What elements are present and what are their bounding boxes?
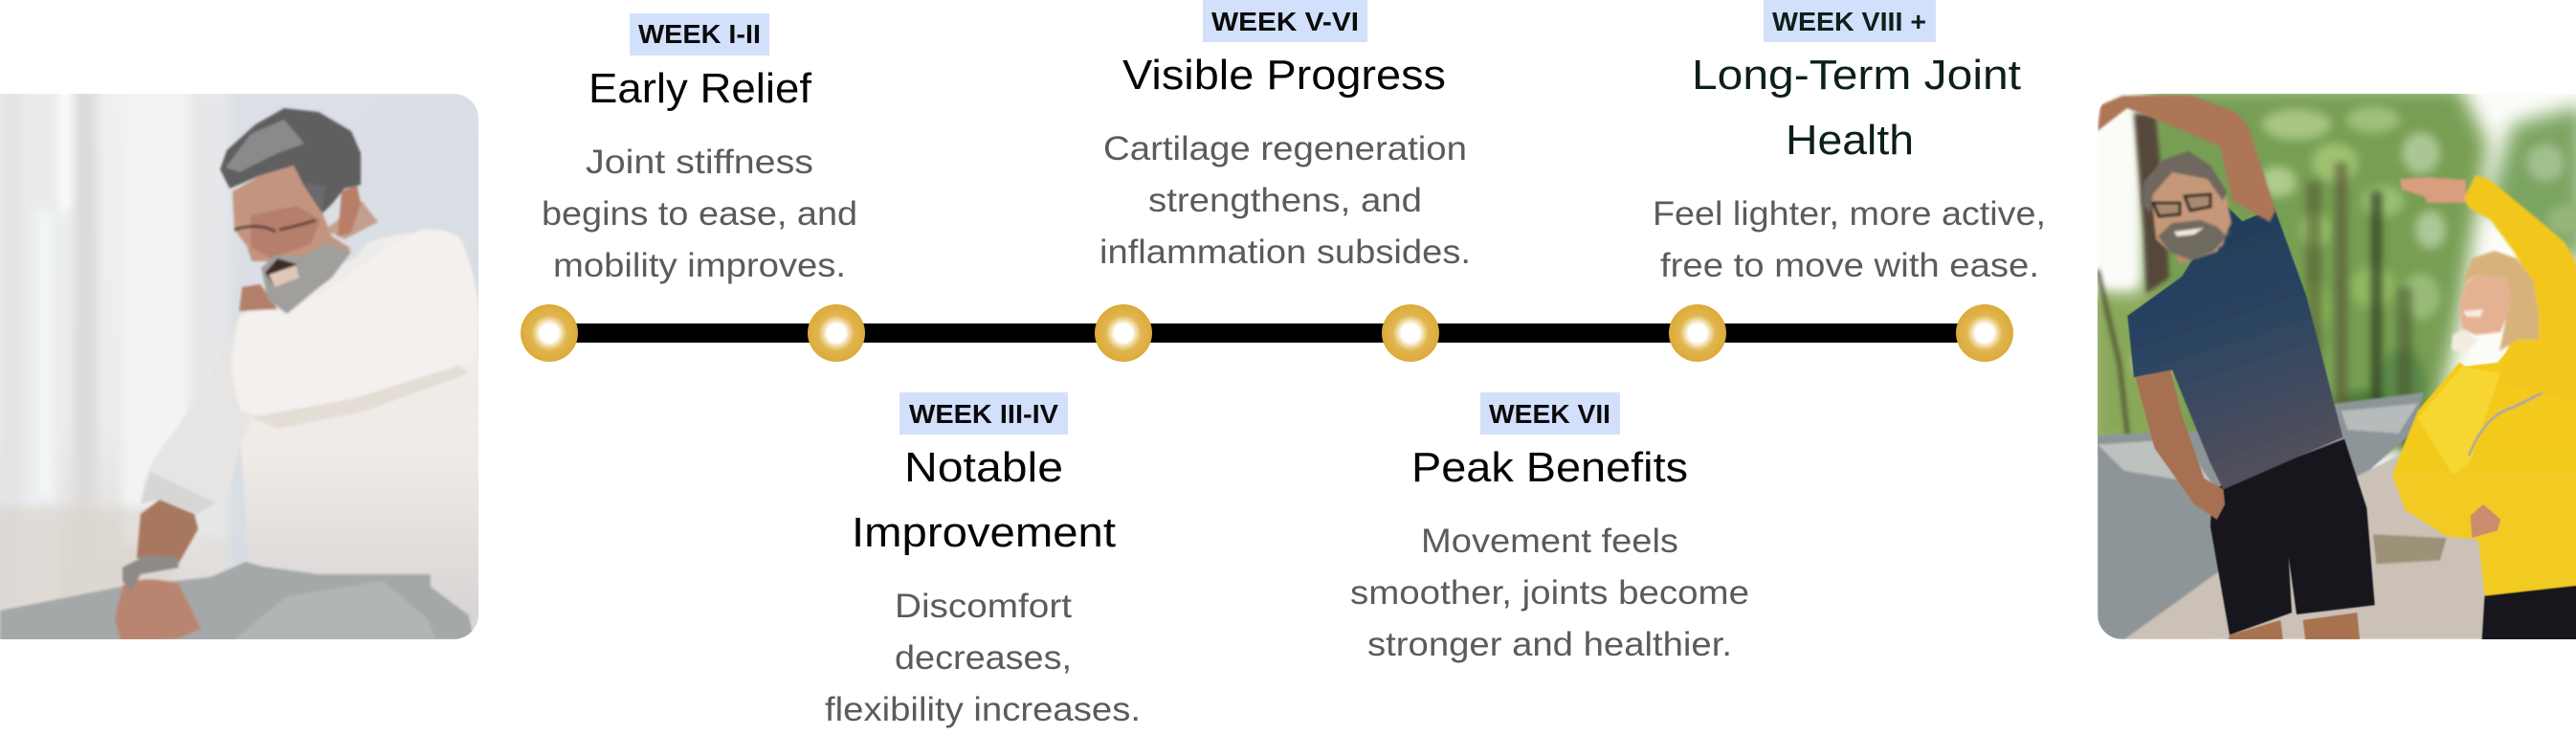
- description: [1099, 130, 1471, 271]
- week badge: [1203, 0, 1367, 42]
- panel: week V-VI visible progress: [1099, 0, 1471, 271]
- description: [542, 144, 857, 284]
- heading: Notable: [904, 444, 1063, 491]
- week badge: WEEK III-IV: [909, 399, 1058, 429]
- timeline: [521, 304, 2013, 362]
- heading: Visible Progress: [1122, 52, 1446, 99]
- timeline nodes: [521, 304, 2013, 362]
- description: [825, 588, 1141, 728]
- timeline line: [549, 323, 1985, 343]
- heading: Peak Benefits: [1411, 444, 1688, 491]
- description: begins to ease, and: [542, 195, 857, 233]
- week badge: WEEK I-II: [638, 19, 761, 49]
- week badge: [630, 13, 769, 56]
- week badge: [1764, 0, 1936, 42]
- panel: week I-II early relief: [542, 13, 857, 284]
- heading: Improvement: [852, 509, 1116, 556]
- heading: Health: [1786, 117, 1914, 164]
- description: [1653, 195, 2046, 284]
- week badge: [1480, 392, 1620, 434]
- heading: [852, 444, 1116, 556]
- panel: week III-IV notable improvement: [825, 392, 1141, 728]
- photo: couple stretching outdoors: [2086, 86, 2576, 646]
- week badge: WEEK VII: [1489, 399, 1610, 429]
- description: Cartilage regeneration: [1103, 130, 1467, 167]
- description: Joint stiffness: [586, 144, 813, 181]
- week badge: [899, 392, 1068, 434]
- week badge: WEEK VIII +: [1772, 7, 1926, 36]
- heading: Early Relief: [588, 65, 812, 112]
- description: Feel lighter, more active,: [1653, 195, 2046, 233]
- heading: Long-Term Joint: [1692, 52, 2021, 99]
- heading: [1692, 52, 2021, 164]
- description: strengthens, and: [1148, 182, 1422, 219]
- description: inflammation subsides.: [1099, 234, 1471, 271]
- description: free to move with ease.: [1660, 247, 2039, 284]
- description: smoother, joints become: [1350, 574, 1749, 612]
- description: flexibility increases.: [825, 691, 1141, 728]
- description: Movement feels: [1421, 523, 1678, 560]
- description: mobility improves.: [553, 247, 846, 284]
- week badge: WEEK V-VI: [1211, 7, 1359, 36]
- description: [1350, 523, 1749, 663]
- panel: week VIII+ long-term joint health: [1653, 0, 2046, 284]
- panel: week VII peak benefits: [1350, 392, 1749, 663]
- description: Discomfort: [895, 588, 1072, 625]
- description: stronger and healthier.: [1367, 626, 1732, 663]
- description: decreases,: [895, 639, 1072, 677]
- photo: man with joint pain: [0, 86, 488, 651]
